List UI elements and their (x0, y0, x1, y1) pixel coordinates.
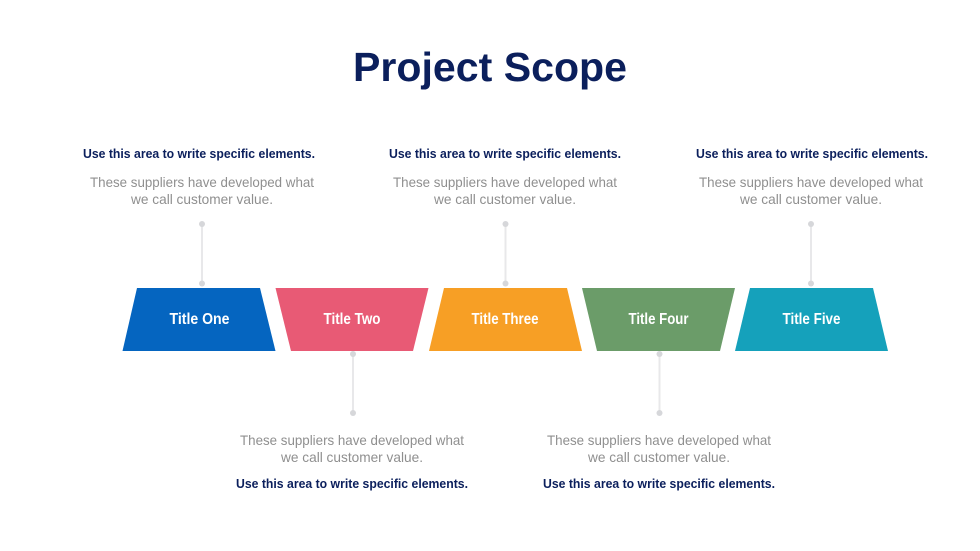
text block: callout three (393, 174, 617, 207)
connector: callout five (808, 221, 814, 286)
heading: callout four: Use this area to write specific elements. (543, 476, 775, 491)
text block: callout one (90, 174, 314, 207)
text block: callout one: we call customer value. (130, 191, 273, 207)
text block: callout four: These suppliers have developed what (547, 432, 771, 448)
title: Project Scope (353, 44, 627, 90)
connector: callout two (350, 351, 356, 416)
trapezoid: title one: Title One (170, 311, 230, 328)
text block: callout five: we call customer value. (739, 191, 882, 207)
panel: callout one (83, 146, 315, 286)
trapezoid: title five: Title Five (782, 311, 841, 328)
text block: callout two: These suppliers have developed what (240, 432, 464, 448)
trapezoid: title four (582, 288, 735, 351)
text block: callout two (240, 432, 464, 465)
heading: callout two: Use this area to write specific elements. (236, 476, 468, 491)
text block: callout five (699, 174, 923, 207)
panel: callout two (236, 351, 468, 491)
trapezoid: title two: Title Two (324, 311, 380, 328)
text block: callout four: we call customer value. (587, 449, 730, 465)
text block: callout five: These suppliers have developed what (699, 174, 923, 190)
text block: callout two: we call customer value. (280, 449, 423, 465)
trapezoid: title one (122, 288, 276, 351)
trapezoid: title two (276, 288, 428, 351)
heading: callout three: Use this area to write specific elements. (389, 146, 621, 161)
text block: callout three: we call customer value. (433, 191, 576, 207)
connector: callout three (502, 221, 508, 286)
text block: callout four (547, 432, 771, 465)
text block: callout one: These suppliers have developed what (90, 174, 314, 190)
heading: callout one: Use this area to write specific elements. (83, 146, 315, 161)
text block: callout three: These suppliers have developed what (393, 174, 617, 190)
trapezoid: title five (735, 288, 888, 351)
panel: callout three (389, 146, 621, 286)
trapezoid: title three: Title Three (472, 311, 539, 328)
connector: callout one (199, 221, 205, 286)
connector: callout four (656, 351, 662, 416)
heading: callout five: Use this area to write specific elements. (696, 146, 928, 161)
panel: callout five (696, 146, 928, 286)
trapezoid: title three (429, 288, 582, 351)
trapezoid: title four: Title Four (628, 311, 688, 328)
panel: callout four (543, 351, 775, 491)
